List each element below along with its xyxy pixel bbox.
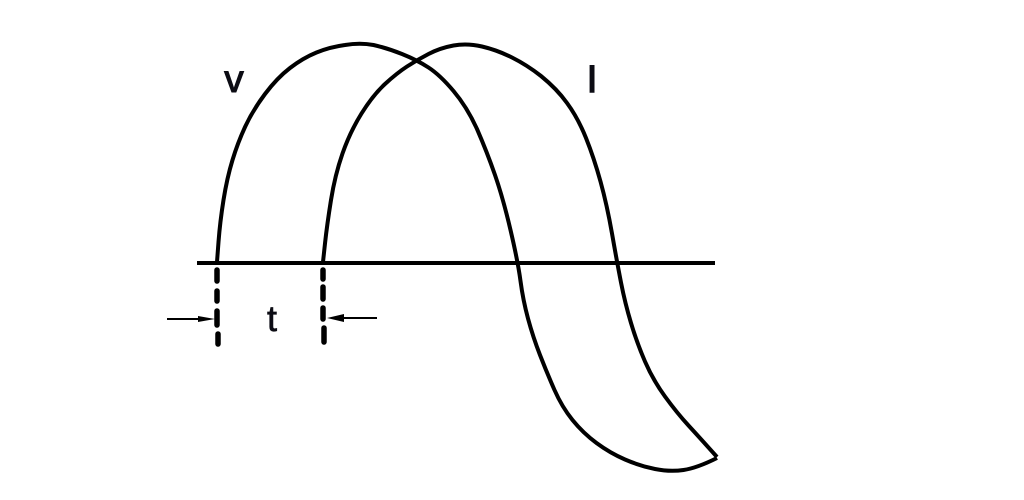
horizontal axis bbox=[197, 261, 715, 265]
label: t: t bbox=[267, 298, 277, 339]
arrow: left of t bbox=[167, 316, 215, 322]
dashed marker at current start bbox=[323, 270, 324, 342]
voltage curve V bbox=[217, 44, 717, 471]
current curve I bbox=[323, 44, 717, 457]
dashed marker at voltage start bbox=[217, 270, 218, 344]
arrow: right of t bbox=[327, 314, 377, 322]
label: V: v bbox=[224, 58, 244, 101]
label: I: I bbox=[587, 59, 597, 101]
